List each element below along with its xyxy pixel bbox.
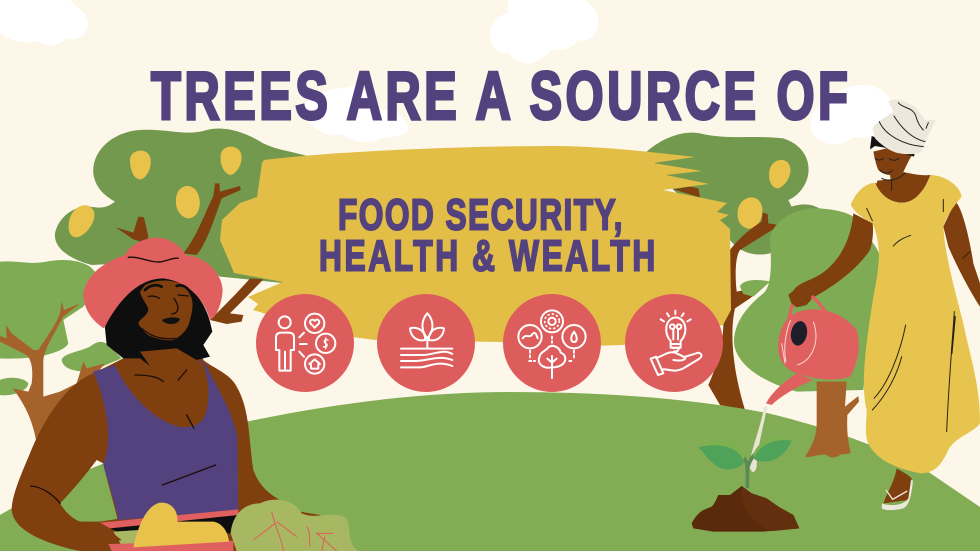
headwrap: [873, 100, 936, 154]
woman with hat and basket: [12, 238, 358, 551]
hair: [105, 275, 212, 366]
tree trunk right: [805, 382, 859, 457]
icon: fruits left tree: [69, 147, 242, 237]
banner heading: [319, 190, 655, 281]
hand: [788, 286, 813, 307]
face: [138, 281, 193, 340]
seedling: [698, 436, 792, 488]
far arm: [943, 202, 980, 307]
tree: front right: [734, 208, 882, 392]
fruit in basket: [133, 503, 229, 547]
near arm: [790, 213, 873, 307]
icon: light bulb over hand: [625, 294, 723, 392]
tree: back left with fruit: [55, 129, 320, 324]
hair: [870, 136, 915, 157]
water stream: [749, 407, 767, 472]
foot: [883, 468, 912, 503]
banner heading: HEALTH & WEALTH: [319, 231, 655, 281]
facial and clothing lines: [31, 257, 216, 503]
icon row: [256, 294, 723, 392]
icon: sprout on field: [377, 294, 475, 392]
title: TREES ARE A SOURCE OF: [151, 57, 848, 134]
neck, chest, face: [873, 147, 931, 203]
sandal: [882, 480, 913, 510]
soil mound: [692, 486, 799, 532]
hat: [83, 238, 223, 328]
dress: [851, 175, 980, 473]
clouds: [0, 0, 893, 144]
icon: tree with sun, water and air: [503, 294, 601, 392]
purple top: [93, 360, 238, 520]
watering can: [766, 294, 859, 405]
tree: small left tree: [0, 260, 122, 453]
body: [12, 337, 323, 551]
neck line: [115, 333, 208, 427]
watering woman: [692, 100, 980, 532]
hill: [0, 392, 980, 551]
banner heading: FOOD SECURITY,: [338, 190, 622, 240]
lips: [162, 317, 180, 324]
leafy greens: [231, 500, 358, 551]
icon: person with health, money and home: [256, 294, 354, 392]
tree: back right with fruit: [647, 133, 822, 410]
yellow brush banner: [220, 146, 731, 347]
basket: [110, 513, 238, 533]
